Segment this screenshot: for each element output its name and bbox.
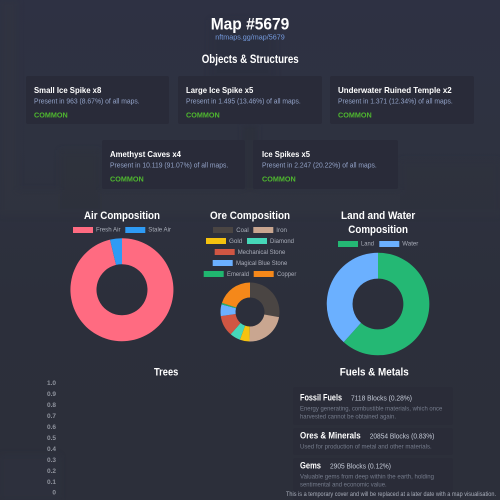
- chart axis: trees: [47, 380, 56, 496]
- heading: land and water composition: Land and Water: [341, 210, 416, 222]
- heading: trees: Trees: [154, 366, 178, 378]
- panel: fossil fuels: [293, 387, 453, 425]
- card: underwater ruined temple: Underwater Ruined Temple x2: [338, 85, 452, 95]
- card: underwater ruined temple: Present in 1.371 (12.34%) of all maps.: [338, 96, 453, 106]
- chart axis: trees: 0.4: [47, 446, 56, 453]
- heading: land and water composition: Composition: [348, 224, 408, 236]
- legend: land and water: Land: [361, 241, 374, 248]
- donut chart: air composition: [70, 238, 173, 341]
- panel: gems: [293, 458, 453, 500]
- chart axis: trees: 0.3: [47, 457, 56, 464]
- panel: ores and minerals: 20854 Blocks (0.83%): [370, 432, 435, 441]
- panel: gems: 2905 Blocks (0.12%): [330, 462, 391, 471]
- legend: land and water: Water: [402, 241, 419, 248]
- card: small ice spike: Present in 963 (8.67%) of all maps.: [34, 96, 140, 106]
- legend: ore composition: Coal: [236, 227, 249, 234]
- panel: ores and minerals: Used for production of metal and other materials.: [300, 443, 432, 450]
- panel: gems: Gems: [300, 461, 321, 471]
- card: amethyst caves: [102, 140, 245, 189]
- legend: air composition: Fresh Air: [96, 227, 121, 234]
- legend: air composition: [73, 227, 172, 234]
- panel: gems: Valuable gems from deep within the earth, holding: [300, 474, 434, 481]
- chart axis: trees: 0.6: [47, 424, 56, 431]
- chart axis: trees: 0.8: [47, 402, 56, 409]
- card: large ice spike: Present in 1.495 (13.46%) of all maps.: [186, 96, 301, 106]
- panel: fossil fuels: Fossil Fuels: [300, 393, 342, 403]
- legend: ore composition: Diamond: [270, 238, 294, 245]
- legend: air composition: Stale Air: [148, 227, 172, 234]
- map link: nftmaps.gg/map/5679: [215, 32, 285, 42]
- card: amethyst caves: COMMON: [110, 174, 144, 183]
- chart axis: trees: 0: [52, 490, 56, 496]
- legend: ore composition: [204, 227, 297, 278]
- panel: fossil fuels: 7118 Blocks (0.28%): [351, 394, 412, 403]
- legend: ore composition: Emerald: [227, 271, 249, 278]
- donut chart: land and water: [327, 253, 429, 355]
- card: underwater ruined temple: [330, 76, 474, 124]
- card: small ice spike: COMMON: [34, 110, 68, 120]
- legend: ore composition: Mechanical Stone: [238, 249, 286, 256]
- legend: ore composition: Magical Blue Stone: [236, 260, 288, 267]
- card: ice spikes: [253, 140, 398, 189]
- card: large ice spike: [178, 76, 322, 124]
- chart axis: trees: 0.1: [47, 479, 56, 486]
- legend: ore composition: Iron: [276, 227, 287, 234]
- heading: ore composition: Ore Composition: [210, 210, 290, 222]
- heading: land and water composition: [341, 210, 416, 236]
- heading: objects and structures: Objects & Structures: [202, 52, 299, 66]
- card: ice spikes: Present in 2.247 (20.22%) of all maps.: [262, 160, 377, 170]
- chart axis: trees: 0.5: [47, 435, 56, 442]
- panel: fossil fuels: harvested cannot be obtained again.: [300, 414, 396, 421]
- panel: ores and minerals: Ores & Minerals: [300, 431, 361, 441]
- panel: gems: sentimental and economic value.: [300, 482, 387, 489]
- card: small ice spike: [26, 76, 169, 124]
- panel: fossil fuels: Energy generating, combustible materials, which once: [300, 406, 443, 413]
- card: large ice spike: Large Ice Spike x5: [186, 85, 254, 95]
- heading: fuels and metals: Fuels & Metals: [340, 366, 409, 378]
- card: ice spikes: Ice Spikes x5: [262, 149, 310, 159]
- card: amethyst caves: Amethyst Caves x4: [110, 149, 181, 159]
- panel: ores and minerals: [293, 428, 453, 455]
- heading: air composition: Air Composition: [84, 210, 160, 222]
- title: Map #5679: [211, 16, 289, 34]
- legend: ore composition: Gold: [229, 238, 243, 245]
- card: amethyst caves: Present in 10.119 (91.07%) of all maps.: [110, 160, 228, 170]
- card: small ice spike: Small Ice Spike x8: [34, 85, 102, 95]
- chart axis: trees: 0.2: [47, 468, 56, 475]
- donut chart: ore composition: [220, 282, 279, 341]
- legend: ore composition: Copper: [277, 271, 297, 278]
- chart axis: trees: 0.7: [47, 413, 56, 420]
- card: ice spikes: COMMON: [262, 174, 296, 183]
- card: underwater ruined temple: COMMON: [338, 110, 372, 120]
- chart axis: trees: 1.0: [47, 380, 56, 387]
- legend: land and water: [338, 241, 419, 248]
- chart axis: trees: 0.9: [47, 391, 56, 398]
- card: large ice spike: COMMON: [186, 110, 220, 120]
